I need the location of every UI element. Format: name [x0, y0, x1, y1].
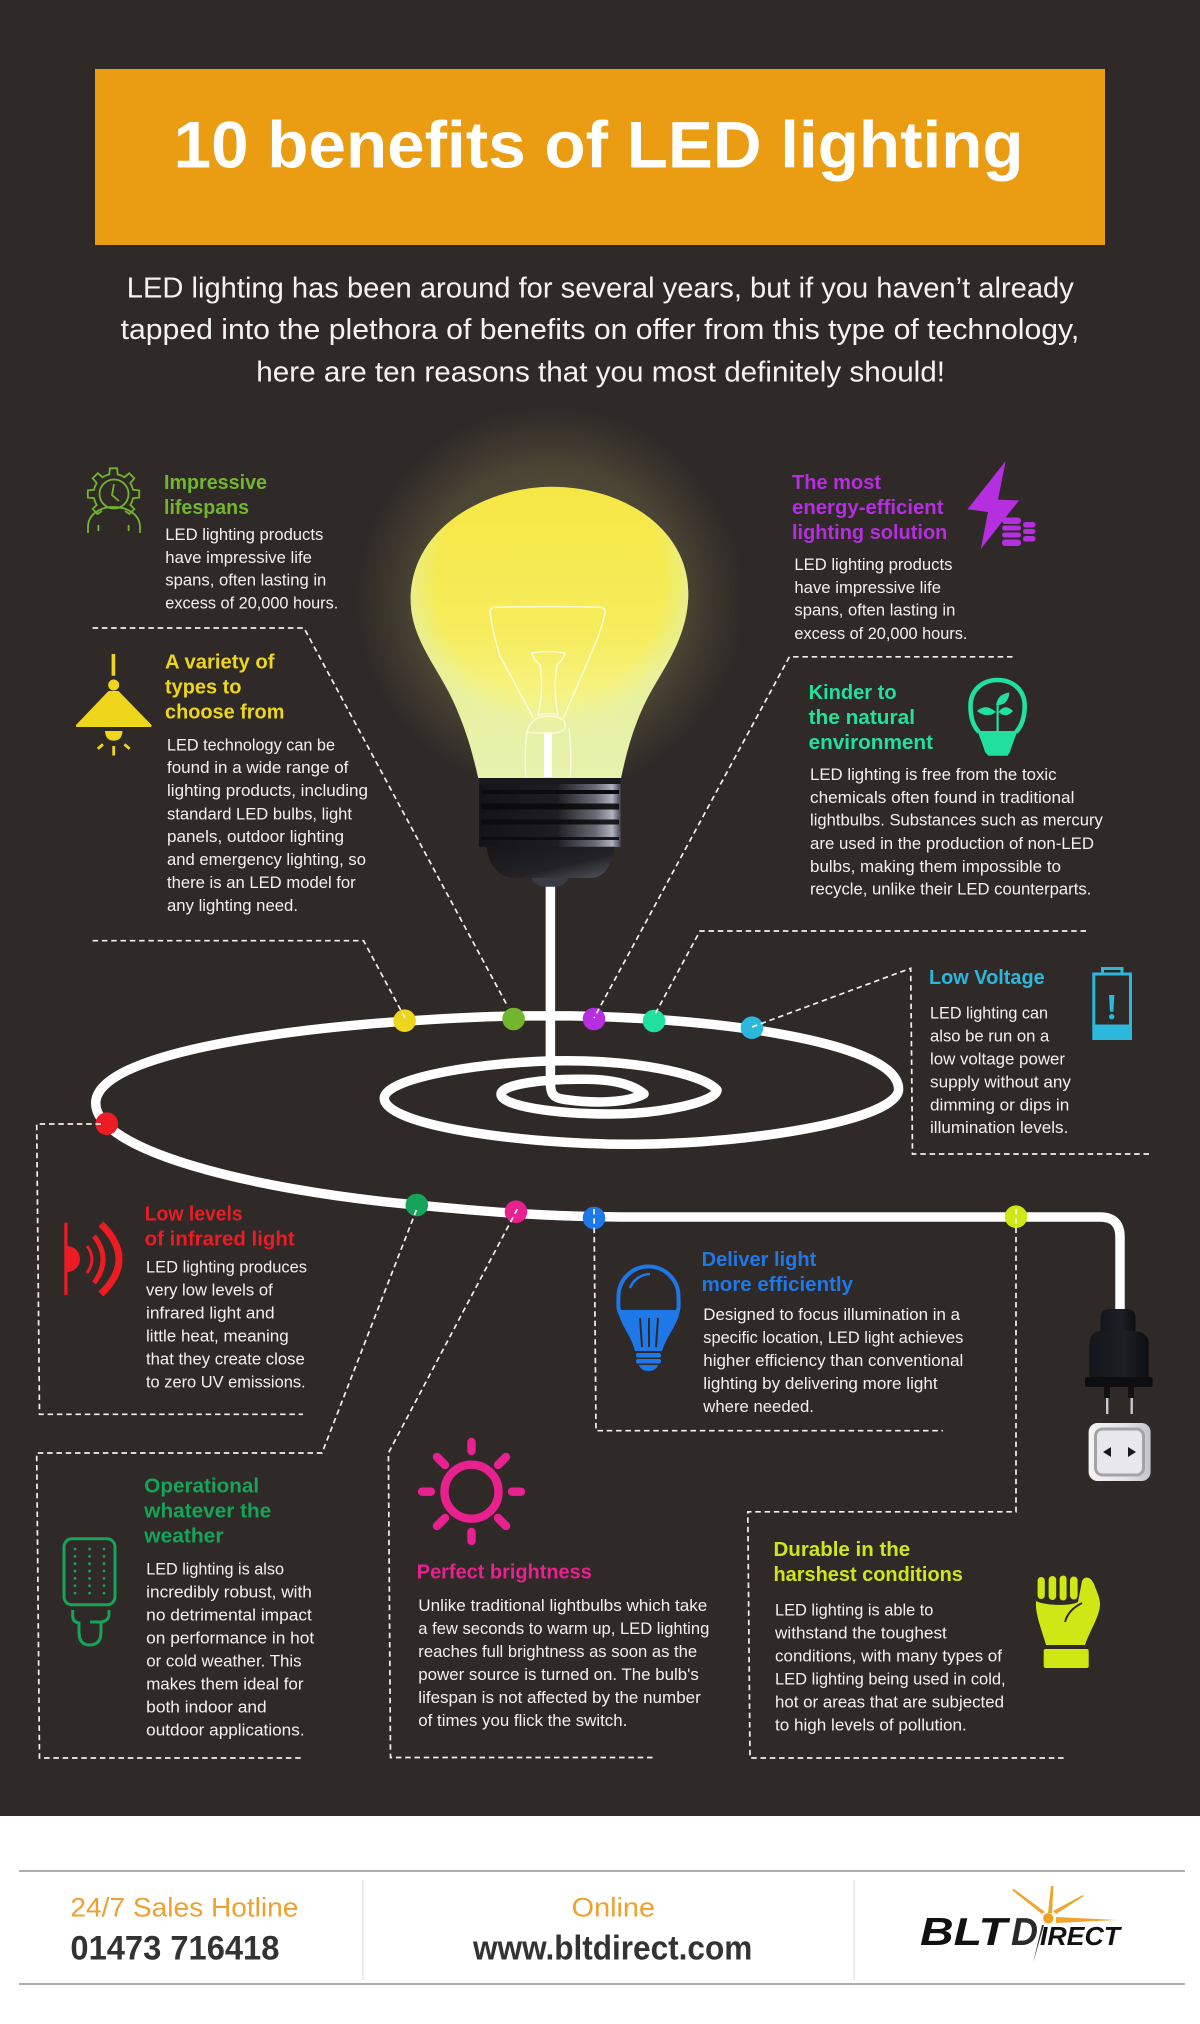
intro text: here are ten reasons that you most definitely should!: [256, 356, 945, 388]
heading: more efficiently: [702, 1274, 854, 1296]
body text: Unlike traditional lightbulbs which take: [418, 1596, 707, 1615]
heading: Impressive: [164, 472, 267, 494]
title banner: [95, 69, 1105, 245]
connector: variety of types: [93, 941, 405, 1018]
body text: lifespan is not affected by the number: [418, 1688, 701, 1707]
body text: outdoor applications.: [146, 1720, 305, 1739]
heading: [774, 1539, 963, 1586]
body text: illumination levels.: [930, 1118, 1068, 1137]
body text: [146, 1559, 314, 1739]
body text: have impressive life: [165, 548, 312, 567]
body text: lighting products, including: [167, 781, 368, 800]
heading: of infrared light: [145, 1229, 295, 1251]
icon: lightning bolt with coins: [967, 461, 1036, 549]
body text: [146, 1258, 307, 1391]
body text: [165, 525, 338, 613]
heading: weather: [143, 1525, 224, 1547]
body text: LED lighting products: [165, 525, 323, 544]
heading: The most: [792, 472, 881, 494]
heading: [143, 1476, 271, 1547]
heading: Low Voltage: [929, 967, 1045, 989]
heading: Low levels: [145, 1204, 243, 1226]
icon: blue bulb: [618, 1266, 680, 1371]
logo: BLT Direct: [920, 1886, 1122, 1963]
body text: LED lighting can: [930, 1003, 1048, 1022]
body text: power source is turned on. The bulb's: [418, 1665, 699, 1684]
body text: found in a wide range of: [167, 758, 349, 777]
body text: or cold weather. This: [146, 1651, 302, 1670]
panel: durable: [774, 1539, 1100, 1734]
intro text: LED lighting has been around for several years, but if you haven’t already: [127, 272, 1075, 304]
icon: fist: [1036, 1576, 1100, 1668]
connector: infrared: [37, 1124, 303, 1414]
icon: gear person: [88, 468, 140, 533]
body text: have impressive life: [794, 578, 941, 597]
heading: lighting solution: [792, 522, 947, 544]
heading: environment: [809, 732, 933, 754]
footer: [0, 1816, 1200, 2024]
light bulb: [411, 487, 688, 887]
body text: spans, often lasting in: [794, 601, 955, 620]
body text: there is an LED model for: [167, 873, 356, 892]
connector: low voltage: [752, 968, 1151, 1154]
body text: LED technology can be: [167, 735, 335, 754]
body text: excess of 20,000 hours.: [165, 594, 338, 613]
body text: very low levels of: [146, 1281, 273, 1300]
connector: weather: [37, 1210, 416, 1758]
body text: conditions, with many types of: [775, 1646, 1002, 1665]
body text: where needed.: [702, 1397, 814, 1416]
connector: impressive lifespans: [93, 628, 508, 1007]
body text: lightbulbs. Substances such as mercury: [810, 811, 1103, 830]
intro text: tapped into the plethora of benefits on offer from this type of technology,: [121, 314, 1079, 346]
body text: reaches full brightness as soon as the: [418, 1642, 697, 1661]
body text: no detrimental impact: [146, 1605, 312, 1624]
body text: [774, 1600, 1006, 1734]
body text: Designed to focus illumination in a: [703, 1305, 961, 1324]
sales hotline: 24/7 Sales Hotline: [70, 1893, 298, 1923]
body text: LED lighting products: [794, 555, 952, 574]
body text: withstand the toughest: [774, 1624, 947, 1642]
panel: natural environment: [809, 680, 1103, 899]
body text: excess of 20,000 hours.: [794, 624, 967, 643]
body text: to high levels of pollution.: [775, 1715, 967, 1734]
sales hotline: [70, 1893, 298, 1967]
icon: pendant lamp: [76, 654, 152, 756]
body text: panels, outdoor lighting: [167, 827, 344, 846]
icon: battery: [1092, 968, 1132, 1040]
heading: Durable in the: [774, 1539, 910, 1561]
panel: impressive lifespans: [88, 468, 338, 613]
body text: spans, often lasting in: [165, 571, 326, 590]
body text: chemicals often found in traditional: [810, 788, 1074, 807]
online: Online: [572, 1893, 655, 1923]
logo: BLT Direct: BLT: [920, 1911, 1011, 1954]
body text: specific location, LED light achieves: [703, 1328, 963, 1347]
body text: [930, 1003, 1071, 1137]
heading: whatever the: [143, 1500, 271, 1522]
body text: a few seconds to warm up, LED lighting: [418, 1619, 709, 1638]
cable marker dots: [96, 1008, 1027, 1229]
icon: LED corn bulb: [64, 1539, 115, 1645]
body text: and emergency lighting, so: [167, 850, 366, 869]
heading: Perfect brightness: [417, 1561, 592, 1583]
body text: of times you flick the switch.: [418, 1711, 627, 1730]
body text: little heat, meaning: [146, 1327, 289, 1346]
body text: both indoor and: [146, 1697, 267, 1716]
body text: low voltage power: [930, 1049, 1065, 1068]
cable spiral and power lead: [96, 880, 1120, 1312]
connector: natural environment: [654, 931, 1086, 1016]
body text: that they create close: [146, 1350, 305, 1369]
heading: lifespans: [164, 497, 249, 519]
body text: makes them ideal for: [146, 1674, 304, 1693]
logo: BLT Direct: IRECT: [1040, 1921, 1122, 1951]
filament: [490, 607, 605, 777]
body text: bulbs, making them impossible to: [810, 857, 1061, 876]
body text: [794, 555, 967, 643]
icon: infrared waves: [64, 1223, 119, 1295]
heading: A variety of: [165, 652, 275, 674]
body text: LED lighting is able to: [775, 1600, 933, 1620]
heading: [164, 472, 267, 519]
online: [472, 1893, 752, 1967]
body text: any lighting need.: [167, 896, 298, 915]
sales hotline: 01473 716418: [70, 1929, 279, 1967]
title banner: 10 benefits of LED lighting: [174, 107, 1024, 181]
online: www.bltdirect.com: [472, 1929, 752, 1967]
intro text: [121, 272, 1079, 388]
body text: higher efficiency than conventional: [703, 1351, 963, 1370]
body text: infrared light and: [146, 1304, 275, 1323]
screw base: [479, 778, 621, 887]
panel: low voltage: [929, 967, 1132, 1137]
illustration: socket: [1089, 1423, 1151, 1481]
heading: [165, 652, 284, 724]
heading: the natural: [809, 707, 915, 729]
heading: [809, 682, 933, 754]
heading: types to: [165, 677, 242, 699]
heading: harshest conditions: [774, 1564, 963, 1586]
panel: variety of types: [76, 652, 368, 915]
panel: infrared: [64, 1204, 307, 1391]
body text: LED lighting produces: [146, 1258, 307, 1277]
icon: sun: [422, 1442, 521, 1541]
heading: [702, 1249, 854, 1296]
heading: Operational: [144, 1476, 259, 1498]
icon: plant in bulb: [970, 680, 1025, 756]
panel: weather: [64, 1476, 314, 1739]
heading: choose from: [165, 702, 284, 724]
body text: are used in the production of non-LED: [810, 834, 1094, 853]
logo: BLT Direct: D: [1011, 1911, 1038, 1954]
body text: standard LED bulbs, light: [167, 804, 352, 823]
body text: lighting by delivering more light: [703, 1374, 938, 1393]
heading: Deliver light: [702, 1249, 817, 1271]
body text: supply without any: [930, 1072, 1071, 1091]
body text: dimming or dips in: [930, 1095, 1069, 1114]
light bulb glow: [355, 405, 745, 795]
panel: brightness: [417, 1442, 709, 1730]
body text: [167, 735, 368, 915]
panel: energy efficient: [792, 461, 1036, 643]
connector: energy efficient: [594, 657, 1012, 1018]
body text: LED lighting is free from the toxic: [810, 765, 1057, 784]
connector: efficiency: [594, 1209, 943, 1431]
heading: energy-efficient: [792, 497, 944, 519]
body text: hot or areas that are subjected: [775, 1692, 1004, 1711]
body text: also be run on a: [930, 1026, 1050, 1045]
heading: [792, 472, 947, 544]
body text: LED lighting being used in cold,: [775, 1669, 1006, 1688]
body text: LED lighting is also: [146, 1559, 284, 1578]
illustration: plug: [1085, 1309, 1153, 1414]
heading: Kinder to: [809, 682, 897, 704]
body text: to zero UV emissions.: [146, 1372, 306, 1391]
body text: [418, 1596, 709, 1730]
body text: on performance in hot: [146, 1628, 314, 1647]
body text: incredibly robust, with: [146, 1582, 312, 1601]
connector: durable: [748, 1209, 1064, 1758]
heading: [145, 1204, 295, 1251]
panel: deliver light: [618, 1249, 963, 1416]
body text: [810, 765, 1103, 899]
body text: [702, 1305, 963, 1416]
connector: brightness: [388, 1209, 654, 1758]
body text: recycle, unlike their LED counterparts.: [810, 880, 1091, 899]
